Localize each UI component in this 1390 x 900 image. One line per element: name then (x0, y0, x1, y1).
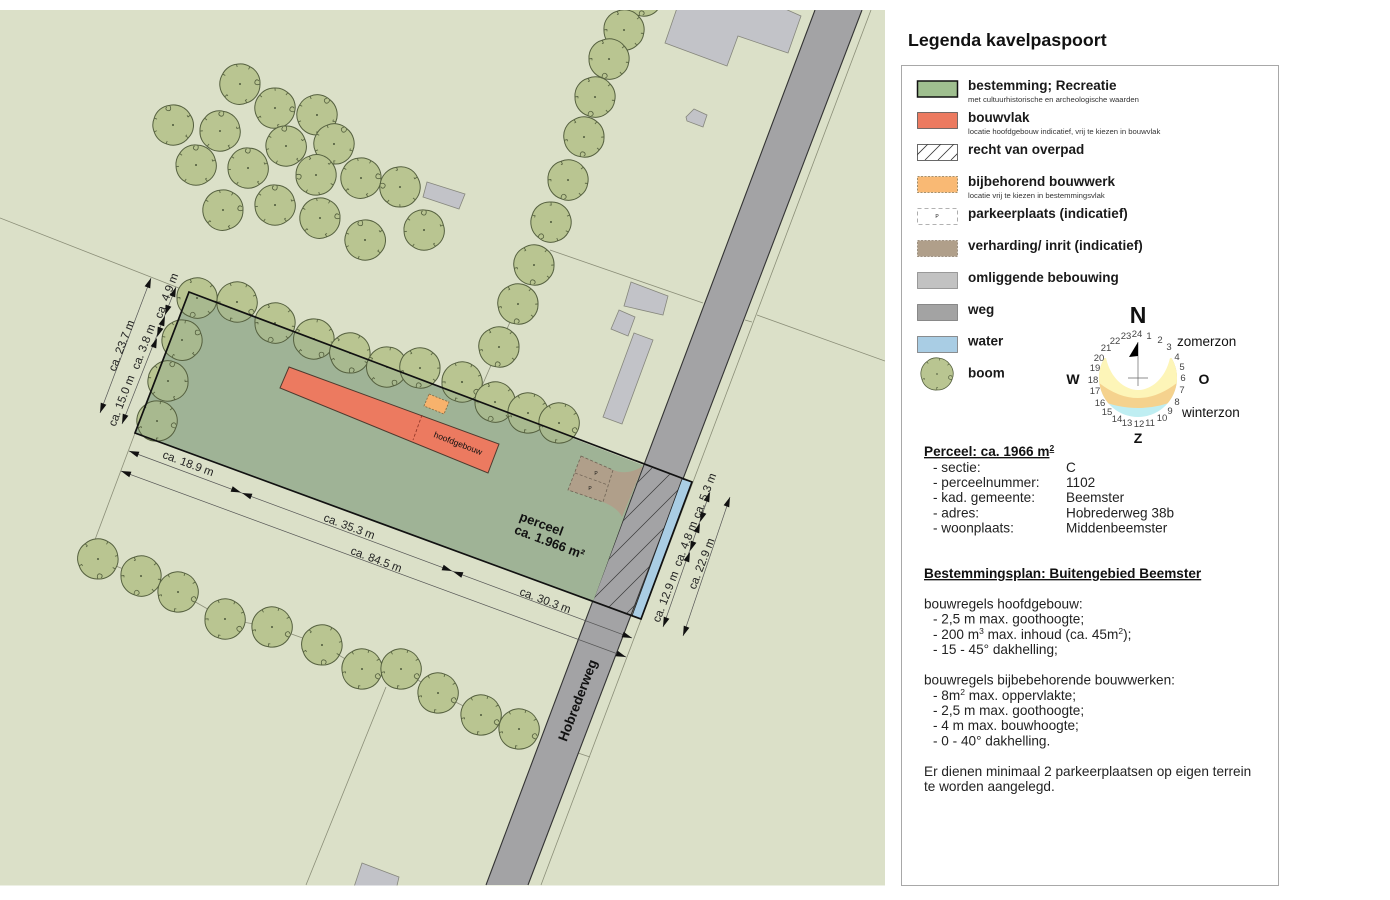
driveway and parking: P (594, 471, 598, 477)
dimensions west side: ca. 23.7 m (107, 319, 137, 373)
map panel (0, 0, 885, 890)
legend: bijbehorend bouwwerk (918, 174, 1116, 200)
hour numbers: 20 (1094, 353, 1104, 364)
parcel info (924, 443, 1174, 536)
dimensions south side: ca. 84.5 m (349, 545, 403, 575)
legend: weg (918, 302, 994, 320)
compass letters (1066, 302, 1210, 446)
road: Hobrederweg (486, 10, 862, 885)
legend: bouwvlak: locatie hoofdgebouw indicatief, vrij te kiezen in bouwvlak (968, 127, 1160, 136)
legend: omliggende bebouwing (918, 270, 1119, 288)
legend: water (918, 334, 1004, 352)
legend: parkeerplaats (918, 206, 1128, 224)
parcel info: Middenbeemster (1066, 520, 1168, 536)
legend: recht van overpad: recht van overpad (968, 142, 1084, 157)
dimensions east side (651, 472, 733, 637)
bouwregels hoofdgebouw: ); (1123, 627, 1131, 642)
legend panel (902, 66, 1278, 886)
bouwregels hoofdgebouw: - 200 m (933, 627, 979, 642)
road name: Hobrederweg (555, 657, 600, 743)
legend: bestemming: bestemming; Recreatie (968, 78, 1117, 93)
legend: boom (914, 351, 1005, 397)
compass letters: O (1199, 371, 1210, 387)
legend: weg: weg (967, 302, 994, 317)
bouwregels bijbehorende bouwwerken (924, 672, 1175, 748)
compass letters: Z (1134, 430, 1143, 446)
parcel label: perceel (518, 509, 566, 539)
hour numbers: 10 (1157, 413, 1167, 424)
dimensions south side: ca. 30.3 m (518, 586, 572, 616)
legend: bijbehorend bouwwerk: locatie vrij te kiezen in bestemmingsvlak (968, 191, 1105, 200)
tree group north (147, 57, 452, 266)
legend: bestemming (918, 78, 1139, 104)
parcel info: Hobrederweg 38b (1066, 506, 1174, 520)
sun labels (1177, 334, 1240, 420)
driveway and parking: P (588, 486, 592, 492)
tree row on parcel edge, outside the parcel (136, 277, 580, 442)
hour numbers: 15 (1102, 407, 1112, 418)
hour numbers: 2 (1157, 335, 1163, 346)
parking note (924, 764, 1251, 794)
bouwregels hoofdgebouw: max. inhoud (ca. 45m (984, 627, 1118, 642)
hour numbers: 3 (1166, 342, 1172, 353)
hour numbers: 23 (1121, 331, 1131, 342)
dimensions east side: ca. 12.9 m (651, 570, 681, 624)
bouwregels hoofdgebouw: - 15 - 45° dakhelling; (933, 642, 1058, 657)
surrounding buildings (353, 8, 801, 890)
bouwregels bijbehorende bouwwerken: - 2,5 m max. goothoogte; (933, 703, 1084, 718)
dimensions east side: ca. 5.3 m (691, 472, 719, 520)
parking note: te worden aangelegd. (924, 779, 1055, 794)
hour numbers: 12 (1134, 419, 1144, 430)
dimensions west side (97, 272, 181, 428)
bouwregels hoofdgebouw: 3 (979, 626, 984, 636)
legend: bouwvlak (918, 110, 1160, 136)
sun compass (1066, 302, 1240, 446)
hour numbers: 4 (1174, 352, 1180, 363)
bouwregels bijbehorende bouwwerken: - 0 - 40° dakhelling. (933, 734, 1050, 748)
dimensions west side: ca. 4.9 m (153, 272, 181, 320)
bouwregels bijbehorende bouwwerken: - 8m (933, 688, 960, 703)
bouwvlak: hoofdgebouw (432, 429, 484, 457)
hour numbers: 24 (1132, 329, 1142, 340)
hour numbers: 11 (1145, 418, 1155, 429)
legend: water: water (967, 334, 1004, 348)
sun labels: zomerzon (1177, 334, 1236, 349)
hour numbers: 13 (1122, 418, 1132, 429)
hour numbers: 18 (1088, 375, 1098, 386)
water (632, 479, 692, 619)
dimensions west side: ca. 3.8 m (130, 323, 158, 371)
bouwregels hoofdgebouw: 2 (1118, 626, 1123, 636)
hour numbers: 5 (1179, 362, 1185, 373)
bouwregels bijbehorende bouwwerken: - 4 m max. bouwhoogte; (933, 718, 1079, 733)
hour numbers: 17 (1090, 386, 1100, 397)
parcel info: Beemster (1066, 490, 1125, 505)
legend: verharding: verharding/ inrit (indicatief) (968, 238, 1143, 253)
legend: parkeerplaats: parkeerplaats (indicatief) (968, 206, 1128, 221)
bouwregels hoofdgebouw: - 2,5 m max. goothoogte; (933, 612, 1084, 626)
bestemmingsplan heading: Bestemmingsplan: Buitengebied Beemster (924, 566, 1202, 581)
legend: bestemming: met cultuurhistorische en archeologische waarden (968, 95, 1139, 104)
compass letters: W (1066, 371, 1080, 387)
parcel info: - kad. gemeente: (933, 490, 1035, 505)
legend: boom: boom (968, 366, 1005, 380)
tree row on parcel edge, inside the parcel (138, 294, 573, 444)
legend: recht van overpad (917, 144, 1084, 161)
hour numbers: 1 (1146, 331, 1152, 342)
parcel label: ca. 1.966 m² (512, 522, 587, 562)
parcel info: Perceel: ca. 1966 m (924, 444, 1049, 459)
sun path bands (1099, 358, 1177, 417)
parcel info: - adres: (933, 506, 979, 520)
bouwvlak (280, 367, 499, 473)
hour numbers: 22 (1110, 336, 1120, 347)
dimensions south side: ca. 18.9 m (161, 449, 215, 479)
tree row south (70, 531, 546, 757)
dimensions west side: ca. 15.0 m (107, 374, 137, 428)
dimensions east side: ca. 22.9 m (687, 537, 717, 591)
bouwregels hoofdgebouw (924, 596, 1131, 657)
parcel info: C (1066, 460, 1076, 475)
compass needle (1128, 342, 1148, 386)
parcel outline (135, 292, 692, 619)
hour numbers: 7 (1179, 385, 1185, 396)
hour numbers (1088, 329, 1186, 430)
hour numbers: 9 (1167, 406, 1173, 417)
hour numbers: 16 (1095, 398, 1105, 409)
bouwregels hoofdgebouw: bouwregels hoofdgebouw: (924, 596, 1083, 612)
parcel info: - woonplaats: (933, 520, 1014, 536)
legend: bijbehorend bouwwerk: bijbehorend bouwwerk (968, 174, 1116, 189)
parcel info: - perceelnummer: (933, 475, 1040, 490)
hour numbers: 19 (1090, 363, 1100, 374)
parcel info: 1102 (1066, 475, 1095, 490)
recht van overpad hatch (594, 468, 678, 614)
parking note: Er dienen minimaal 2 parkeerplaatsen op eigen terrein (924, 764, 1251, 779)
parcel info: 2 (1049, 443, 1054, 453)
hour numbers: 14 (1112, 414, 1122, 425)
dimensions south side (120, 448, 633, 660)
tree row along path (478, 10, 658, 368)
bouwregels bijbehorende bouwwerken: bouwregels bijbebehorende bouwwerken: (924, 672, 1175, 688)
bijbehorend bouwwerk (424, 394, 449, 414)
legend title: Legenda kavelpaspoort (908, 30, 1107, 50)
legend: bouwvlak: bouwvlak (968, 110, 1030, 125)
hour numbers: 6 (1180, 373, 1186, 384)
dimensions east side: ca. 4.8 m (672, 520, 700, 568)
sun labels: winterzon (1181, 405, 1240, 420)
dimensions south side: ca. 35.3 m (322, 512, 376, 542)
compass letters: N (1130, 302, 1146, 328)
hour numbers: 8 (1174, 397, 1180, 408)
legend: omliggende bebouwing: omliggende bebouwing (968, 270, 1119, 285)
legend: parkeerplaats: P (935, 214, 939, 220)
parcel boundary lines (0, 10, 885, 885)
bouwregels bijbehorende bouwwerken: 2 (960, 687, 965, 697)
parcel info: - sectie: (933, 460, 981, 475)
bouwregels bijbehorende bouwwerken: max. oppervlakte; (965, 688, 1076, 703)
hour numbers: 21 (1101, 343, 1111, 354)
parcel area: bestemming Recreatie (135, 292, 643, 602)
legend: verharding (918, 238, 1143, 256)
driveway and parking (568, 456, 643, 517)
